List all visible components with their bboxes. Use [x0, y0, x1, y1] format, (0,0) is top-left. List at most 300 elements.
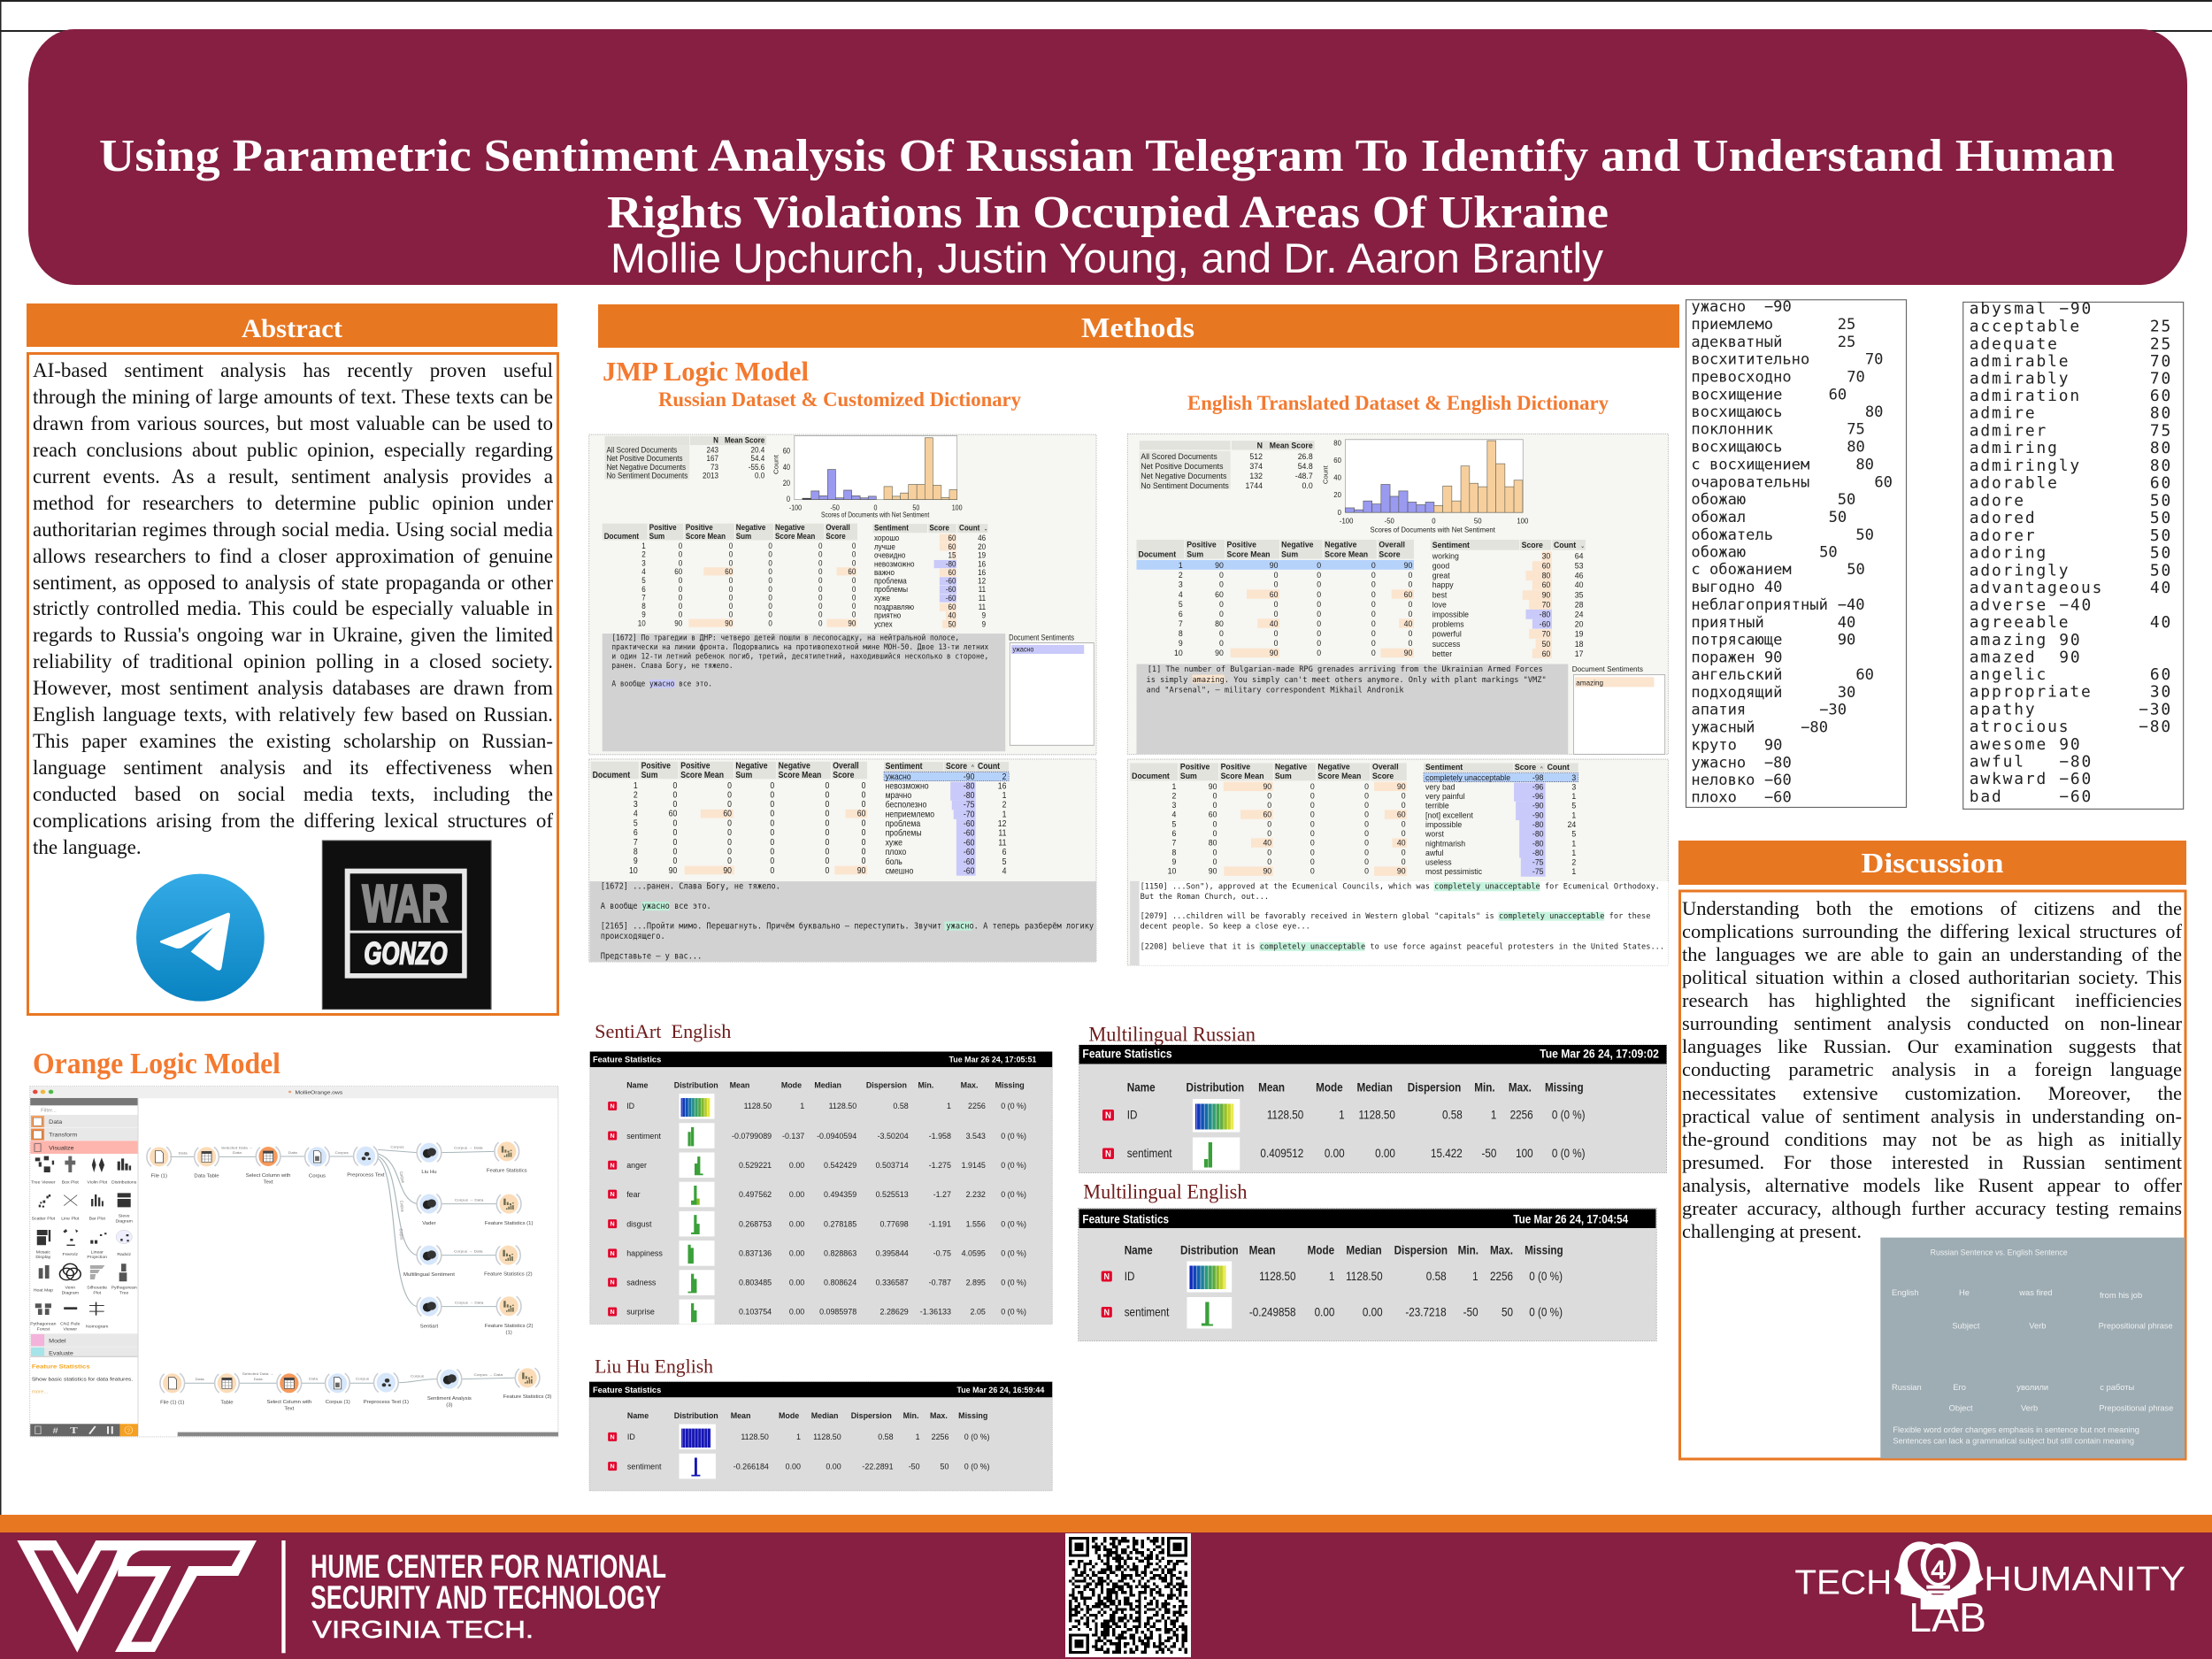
- document score table: 0: [729, 576, 733, 585]
- sentiment score table sorted by score: worst: [1425, 829, 1444, 839]
- widget sidebar: Pythagorean: [111, 1286, 137, 1290]
- panel: Liu Hu statistics: Name: [627, 1411, 649, 1420]
- document score table: 60: [674, 566, 682, 576]
- widget sidebar: Scatter Plot: [32, 1217, 56, 1221]
- sentiment score table: -60: [946, 593, 956, 603]
- Russian dictionary list: −30: [1819, 702, 1847, 719]
- sentiment score table sorted by score: Sentiment: [1425, 763, 1463, 772]
- Multilingual English heading: Multilingual English: [1083, 1180, 1248, 1203]
- panel: SentiArt statistics: 0.00: [789, 1249, 804, 1258]
- sentiment score table: 46: [978, 533, 986, 542]
- Russian dictionary list: приемлемо: [1691, 316, 1773, 334]
- panel: Liu Hu statistics: 0.00: [786, 1462, 801, 1471]
- English dictionary list: 50: [2150, 562, 2172, 580]
- document score table: 10: [629, 864, 638, 875]
- document score table: 90: [1215, 649, 1224, 657]
- panel: Russian most negative terms: [589, 759, 1096, 962]
- Russian dictionary list: 80: [1865, 403, 1883, 421]
- panel: Multilingual English statistics: Mean: [1249, 1244, 1276, 1257]
- discussion text: the-ground conditions may not be as high as initially: [1682, 1128, 2182, 1150]
- Russian vs English sentence diagram: Russian: [1892, 1383, 1922, 1392]
- workflow labels: Vader: [422, 1221, 436, 1226]
- document score table: 0: [826, 827, 829, 837]
- histogram of net sentiment: 100: [1517, 518, 1529, 526]
- sentiment score table: [872, 523, 987, 628]
- document score table: 0: [727, 798, 732, 809]
- panel: SentiArt statistics: 0 (0 %): [1001, 1132, 1026, 1141]
- Russian dictionary list: ужасно: [1691, 754, 1746, 772]
- Russian column subheading: Russian Dataset & Customized Dictionary: [658, 388, 1021, 411]
- Russian vs English sentence diagram: Verb: [2021, 1404, 2038, 1413]
- document score table: 0: [729, 549, 733, 559]
- Russian dictionary list: восхитительно: [1691, 351, 1809, 368]
- sentiment score table: 11: [979, 585, 986, 594]
- sentiment score table: Sentiment: [1432, 541, 1470, 549]
- document score table: 0: [727, 780, 732, 790]
- keyword in context excerpt: [1130, 881, 1668, 965]
- document score table: Score Mean: [1325, 549, 1368, 559]
- sentiment score table sorted by score: 24: [1568, 820, 1576, 829]
- discussion heading bar: Discussion: [1862, 847, 2004, 879]
- panel: SentiArt statistics: N: [611, 1133, 615, 1140]
- document score table: 0: [818, 566, 823, 576]
- panel: SentiArt statistics: 0.00: [789, 1190, 804, 1199]
- document score table: Positive: [1187, 540, 1217, 549]
- sentiment score table: Count: [959, 523, 979, 533]
- widget sidebar: #: [53, 1427, 58, 1436]
- summary table: 374: [1249, 462, 1263, 471]
- widget sidebar: Bar Plot: [89, 1217, 106, 1221]
- widget sidebar: Projection: [87, 1255, 108, 1260]
- panel: Liu Hu statistics: Feature Statistics: [593, 1386, 661, 1394]
- panel: SentiArt statistics: Dispersion: [866, 1080, 907, 1089]
- document score table: 0: [768, 618, 772, 627]
- workflow nodes: [147, 1139, 540, 1395]
- sentiment score table: 60: [1542, 649, 1550, 658]
- panel: SentiArt statistics: 0.808624: [824, 1278, 856, 1286]
- document score table: 0: [862, 789, 865, 800]
- histogram of net sentiment: -100: [789, 503, 802, 512]
- methods heading bar: Methods: [1081, 311, 1194, 343]
- document score table: Overall: [1379, 540, 1405, 549]
- footer band: [0, 1515, 2212, 1659]
- sentiment score table: 70: [1542, 600, 1550, 609]
- document score table: 0: [826, 808, 829, 818]
- sentiment score table: 64: [1575, 551, 1583, 561]
- summary table: Net Positive Documents: [1141, 462, 1224, 471]
- panel: Multilingual English statistics: 2256: [1490, 1270, 1513, 1283]
- document sentiments list: [1009, 634, 1094, 745]
- document score table: 0: [1317, 561, 1321, 570]
- sentiment score table: 80: [1542, 571, 1550, 580]
- workflow labels: (3): [446, 1403, 453, 1408]
- document score table: 0: [1310, 838, 1315, 848]
- document score table: 90: [669, 864, 677, 875]
- English dictionary list: 30: [2150, 684, 2172, 702]
- panel: Multilingual Russian statistics: Median: [1357, 1081, 1393, 1094]
- workflow labels: Feature Statistics (1): [485, 1221, 534, 1226]
- workflow labels: Preprocess Text: [347, 1173, 385, 1178]
- abstract text: However, most sentiment analysis databases are drawn from: [33, 677, 553, 699]
- summary table: 0.0: [1302, 481, 1313, 490]
- sentiment score table: 70: [1542, 629, 1550, 639]
- widget sidebar: Filter...: [41, 1109, 57, 1113]
- abstract text: current events. As a result, sentiment analysis provides a: [33, 465, 553, 488]
- English dictionary list: advantageous: [1970, 580, 2103, 597]
- English dictionary list: −60: [2059, 788, 2093, 806]
- English dictionary list: −60: [2059, 771, 2093, 788]
- panel: Liu Hu statistics: Max.: [930, 1411, 948, 1420]
- Russian dictionary list: обожатель: [1691, 526, 1773, 544]
- Russian dictionary list: обожаю: [1691, 491, 1746, 509]
- document score table: 0: [727, 827, 732, 837]
- widget sidebar: Diagram: [62, 1291, 79, 1295]
- document text excerpt: [603, 634, 1005, 751]
- sentiment score table: -60: [1540, 619, 1550, 628]
- document score table: 0: [768, 576, 772, 585]
- English dictionary list: 70: [2150, 353, 2172, 371]
- sentiment score table sorted by score: проблемы: [886, 827, 922, 838]
- widget sidebar: Diagram: [115, 1219, 133, 1224]
- panel: SentiArt statistics: sadness: [626, 1278, 657, 1286]
- document score table: 0: [826, 855, 829, 865]
- document score table: 0: [1213, 857, 1217, 866]
- sentiment score table: 16: [978, 559, 986, 568]
- English dictionary list: awesome: [1970, 736, 2047, 754]
- document score table: 0: [818, 610, 823, 619]
- document score table: 0: [1402, 829, 1406, 838]
- document score table: 0: [1371, 619, 1376, 628]
- sentiment score table: ⌄: [984, 526, 987, 533]
- Russian dictionary list: 80: [1855, 457, 1874, 473]
- document score table: 60: [1270, 590, 1279, 599]
- panel: Liu Hu statistics: [589, 1382, 1052, 1491]
- Russian dictionary list: [1686, 298, 1907, 807]
- summary table: Net Negative Documents: [1141, 472, 1227, 480]
- help text: Feature Statistics: [32, 1363, 90, 1370]
- sentiment score table: 60: [949, 602, 956, 611]
- document score table: 0: [1402, 801, 1406, 810]
- workflow labels: Corpus: [356, 1377, 370, 1380]
- English dictionary list: 70: [2150, 371, 2172, 388]
- document score table: 0: [727, 836, 732, 847]
- document score table: Document: [604, 532, 639, 541]
- abstract text: conducted based on social media texts, including the: [33, 783, 553, 805]
- sentiment score table: 50: [1542, 640, 1550, 649]
- sentiment score table sorted by score: хуже: [886, 837, 902, 847]
- sentiment score table sorted by score: 1: [1002, 809, 1006, 819]
- Russian vs English sentence diagram: Object: [1949, 1404, 1973, 1413]
- Russian dictionary list: восхищаюсь: [1691, 439, 1782, 457]
- English dictionary list: admiring: [1970, 440, 2059, 457]
- document score table: 0: [1317, 600, 1321, 609]
- abstract text: AI-based sentiment analysis has recently proven useful: [33, 359, 553, 381]
- document score table: 0: [1317, 629, 1321, 638]
- document score table: 0: [679, 584, 682, 594]
- summary table: [604, 435, 766, 480]
- English dictionary list: admiration: [1970, 388, 2081, 405]
- sentiment score table sorted by score: Count: [1548, 763, 1570, 772]
- document score table: 0: [1274, 580, 1279, 589]
- workflow labels: File (1): [151, 1174, 167, 1179]
- sentiment score table: 40: [1575, 580, 1583, 589]
- poster title: Rights Violations In Occupied Areas Of Ukraine: [607, 188, 1609, 238]
- widget sidebar: Data: [49, 1119, 63, 1125]
- sentiment score table sorted by score: Count: [978, 760, 1001, 771]
- English dictionary list: adore: [1970, 493, 2025, 510]
- English dictionary list: 50: [2150, 510, 2172, 527]
- keyword in context excerpt: decent people. So keep a close eye...: [1141, 923, 1310, 932]
- workflow labels: Text: [284, 1407, 295, 1411]
- sentiment score table sorted by score: 2: [1002, 771, 1006, 781]
- English dictionary list: 90: [2059, 632, 2082, 649]
- document score table: 0: [1364, 819, 1369, 828]
- panel: SentiArt statistics: 0.278185: [824, 1219, 856, 1228]
- panel: SentiArt statistics: -0.0940594: [817, 1132, 856, 1141]
- icon: War Gonzo logo: [322, 841, 491, 1010]
- abstract text: through the mining of large amounts of text. These texts can be: [33, 386, 553, 408]
- sentiment score table sorted by score: -90: [964, 771, 974, 781]
- document score table: 0: [1267, 857, 1271, 866]
- document score table: 0: [673, 780, 677, 790]
- English dictionary list: −40: [2059, 596, 2093, 614]
- sentiment score table sorted by score: most pessimistic: [1425, 867, 1483, 876]
- document score table: 0: [1371, 610, 1376, 618]
- document score table: 0: [1364, 791, 1369, 801]
- sentiment score table: -60: [946, 576, 956, 586]
- document score table: 0: [679, 601, 682, 611]
- sentiment score table: 60: [949, 567, 956, 577]
- summary table: 54.4: [751, 453, 764, 463]
- document score table: 0: [1267, 829, 1271, 838]
- document score table: Score Mean: [1221, 772, 1264, 780]
- Russian dictionary list: поражен: [1691, 649, 1755, 666]
- sentiment score table: powerful: [1432, 629, 1462, 639]
- panel: Multilingual Russian statistics: Missing: [1545, 1081, 1584, 1094]
- Hume Center wordmark: [311, 1548, 666, 1643]
- sentiment score table sorted by score: 1: [1002, 789, 1006, 800]
- document score table: 0: [770, 846, 774, 856]
- panel: Multilingual English statistics: Median: [1346, 1244, 1382, 1257]
- type badges: [608, 1102, 617, 1316]
- sentiment score table: 60: [949, 533, 956, 542]
- workflow labels: Corpus: [399, 1201, 405, 1213]
- histogram of net sentiment: 100: [952, 503, 963, 512]
- document score table: 0: [1310, 819, 1315, 828]
- document score table: 7: [1179, 619, 1183, 628]
- sentiment score table: -80: [1540, 610, 1550, 619]
- panel: Multilingual English statistics: Feature Statistics: [1082, 1213, 1169, 1226]
- distribution thumbnails: [679, 1094, 714, 1324]
- icon: Tech4Humanity Lab logo: 4: [1931, 1555, 1946, 1585]
- panel: Liu Hu statistics: 0.00: [826, 1462, 841, 1471]
- document score table: 0: [673, 846, 677, 856]
- sentiment score table sorted by score: -80: [964, 789, 974, 800]
- histogram of net sentiment: 0: [1432, 518, 1436, 526]
- sentiment score table sorted by score: ^: [1540, 765, 1543, 772]
- histogram of net sentiment: -50: [831, 503, 840, 512]
- sentiment score table: успех: [874, 619, 893, 628]
- document score table: Document: [1132, 772, 1170, 780]
- panel: Liu Hu statistics: -0.266184: [733, 1462, 769, 1471]
- panel: Multilingual Russian statistics: Dispersion: [1408, 1081, 1461, 1094]
- sentiment score table sorted by score: 1: [1571, 849, 1576, 857]
- document score table: 0: [1364, 848, 1369, 857]
- abstract text: authoritarian regimes through social media. Using social media: [33, 518, 553, 541]
- summary table: Mean Score: [725, 435, 764, 445]
- panel: SentiArt statistics: 1: [800, 1102, 804, 1110]
- panel: Multilingual English statistics: -23.7218: [1405, 1306, 1447, 1319]
- document score table: 1: [1179, 561, 1183, 570]
- sentiment score table sorted by score: 16: [998, 780, 1006, 791]
- workflow labels: Data Table: [194, 1174, 219, 1179]
- sentiment score table: 11: [979, 593, 986, 603]
- document text excerpt: [1672] По трагедии в ДНР: четверо детей пошли в лесопосадку, на нейтральной полосе,: [611, 634, 959, 643]
- panel: SentiArt statistics: N: [611, 1162, 615, 1169]
- English dictionary list: 50: [2150, 493, 2172, 510]
- document score table: 0: [1219, 629, 1224, 638]
- panel: Multilingual Russian statistics: Tue Mar 26 24, 17:09:02: [1540, 1047, 1659, 1061]
- panel: SentiArt statistics: 0.00: [789, 1308, 804, 1317]
- document score table: 0: [727, 789, 732, 800]
- document score table: 0: [818, 584, 823, 594]
- summary table: No Sentiment Documents: [1141, 481, 1229, 490]
- workflow labels: Corpus: [411, 1374, 425, 1379]
- panel: Multilingual English statistics: Min.: [1458, 1244, 1479, 1257]
- widget sidebar: Silhouette: [87, 1286, 108, 1290]
- keyword in context excerpt: [2165] ...Пройти мимо. Перешагнуть. Причём буквально – переступить. Звучит ужасно. А теперь разберём логику: [601, 921, 1094, 932]
- workflow labels: Corpus: [398, 1228, 404, 1240]
- workflow labels: Selected Data →: [221, 1146, 253, 1149]
- document score table: 0: [1274, 639, 1279, 648]
- workflow labels: Sentiment Analysis: [427, 1396, 472, 1402]
- sentiment score table: 46: [1575, 571, 1583, 580]
- Russian dictionary list: восхищение: [1691, 386, 1782, 403]
- panel: Liu Hu statistics: 0.58: [878, 1432, 894, 1441]
- sentiment score table: 30: [1542, 551, 1550, 561]
- document score table: 90: [1397, 782, 1406, 791]
- panel: Multilingual English statistics: Mode: [1308, 1244, 1334, 1257]
- document score table: 6: [641, 584, 646, 594]
- document score table: Negative: [1281, 540, 1314, 549]
- Russian dictionary list: 50: [1855, 526, 1874, 544]
- English dictionary list: 40: [2150, 580, 2172, 597]
- panel: Multilingual English statistics: -50: [1463, 1306, 1479, 1319]
- document score table: 0: [727, 846, 732, 856]
- document score table: [1136, 540, 1414, 657]
- document score table: 9: [1172, 857, 1176, 866]
- panel: SentiArt statistics: 0 (0 %): [1001, 1249, 1026, 1258]
- sentiment score table sorted by score: 2: [1571, 857, 1576, 867]
- Russian dictionary list: ужасный: [1691, 719, 1755, 736]
- panel: Multilingual English statistics: [1079, 1209, 1656, 1341]
- document score table: 0: [1310, 866, 1315, 876]
- document sentiments list: [1572, 664, 1665, 754]
- panel: Liu Hu statistics: 0 (0 %): [964, 1432, 990, 1441]
- sentiment score table sorted by score: 5: [1571, 829, 1576, 839]
- document score table: 0: [1371, 639, 1376, 648]
- sentiment score table: success: [1432, 640, 1461, 649]
- document score table: 40: [1270, 619, 1279, 628]
- sentiment score table sorted by score: ^: [972, 764, 975, 772]
- workflow labels: Data: [196, 1377, 204, 1381]
- panel: SentiArt statistics: Mean: [730, 1080, 749, 1089]
- document score table: 0: [679, 549, 682, 559]
- panel: Multilingual Russian statistics: 0 (0 %): [1552, 1147, 1586, 1160]
- English dictionary list: angelic: [1970, 666, 2047, 684]
- English dictionary list: adequate: [1970, 335, 2059, 353]
- document sentiments list: ужасно: [1013, 645, 1033, 654]
- document score table: 60: [1397, 810, 1406, 819]
- document score table: 5: [1172, 819, 1176, 828]
- sentiment score table sorted by score: 11: [998, 827, 1006, 838]
- panel: Liu Hu statistics: Tue Mar 26 24, 16:59:44: [956, 1386, 1044, 1394]
- document score table: 0: [818, 549, 823, 559]
- document score table: Score: [1379, 549, 1401, 559]
- English dictionary list: admirably: [1970, 371, 2070, 388]
- document score table: Positive: [641, 760, 671, 771]
- Russian dictionary list: восхищаюсь: [1691, 403, 1782, 421]
- document score table: 7: [1172, 838, 1176, 848]
- document score table: 4: [634, 808, 638, 818]
- Russian dictionary list: 80: [1847, 439, 1865, 457]
- workflow labels: Feature Statistics: [487, 1169, 527, 1173]
- document score table: 10: [1174, 649, 1183, 657]
- abstract text: English language texts, with relatively few based on Russian.: [33, 703, 553, 726]
- panel: SentiArt statistics: 1.9145: [962, 1161, 986, 1170]
- document score table: 0: [768, 541, 772, 550]
- document score table: 60: [725, 566, 733, 576]
- panel: Multilingual English statistics: ID: [1125, 1270, 1134, 1283]
- panel: Liu Hu statistics: Distribution: [674, 1411, 718, 1420]
- sentiment score table sorted by score: Sentiment: [886, 760, 923, 771]
- histogram of net sentiment: -100: [1340, 518, 1354, 526]
- document score table: 0: [770, 818, 774, 828]
- document score table: 0: [1213, 819, 1217, 828]
- document score table: 0: [679, 610, 682, 619]
- histogram of net sentiment: 40: [1333, 474, 1341, 482]
- Russian vs English sentence diagram: Flexible word order changes emphasis in sentence but not meaning: [1893, 1425, 2139, 1434]
- document score table: 0: [1317, 580, 1321, 589]
- abstract text: the language.: [33, 836, 142, 858]
- document score table: 7: [641, 593, 646, 603]
- Russian dictionary list: подходящий: [1691, 684, 1782, 702]
- sentiment score table sorted by score: very painful: [1425, 792, 1465, 801]
- panel: Multilingual Russian statistics: 1: [1339, 1109, 1345, 1122]
- English dictionary list: admirer: [1970, 423, 2047, 441]
- document score table: Sum: [641, 769, 657, 780]
- Russian dictionary list: плохо: [1691, 789, 1737, 807]
- English dictionary list: 25: [2150, 335, 2172, 353]
- widget sidebar: Sieve: [119, 1214, 130, 1218]
- document score table: 0: [1371, 600, 1376, 609]
- panel: SentiArt statistics: disgust: [626, 1219, 652, 1228]
- document score table: 90: [848, 618, 856, 627]
- document score table: Document: [593, 769, 631, 780]
- panel: Russian summary and documents: [589, 434, 1096, 755]
- panel: English most negative terms: [1127, 759, 1668, 965]
- English dictionary list: appropriate: [1970, 684, 2093, 702]
- sentiment score table sorted by score: -60: [964, 865, 974, 876]
- widget sidebar: Evaluate: [49, 1351, 73, 1356]
- panel: SentiArt statistics: N: [611, 1250, 615, 1257]
- widget sidebar: Forest: [37, 1327, 50, 1332]
- histogram of net sentiment: 0: [787, 495, 790, 503]
- Russian dictionary list: круто: [1691, 737, 1737, 754]
- histogram of net sentiment: 40: [783, 464, 790, 472]
- widget sidebar: Tree: [119, 1291, 129, 1295]
- summary table: 243: [707, 445, 718, 454]
